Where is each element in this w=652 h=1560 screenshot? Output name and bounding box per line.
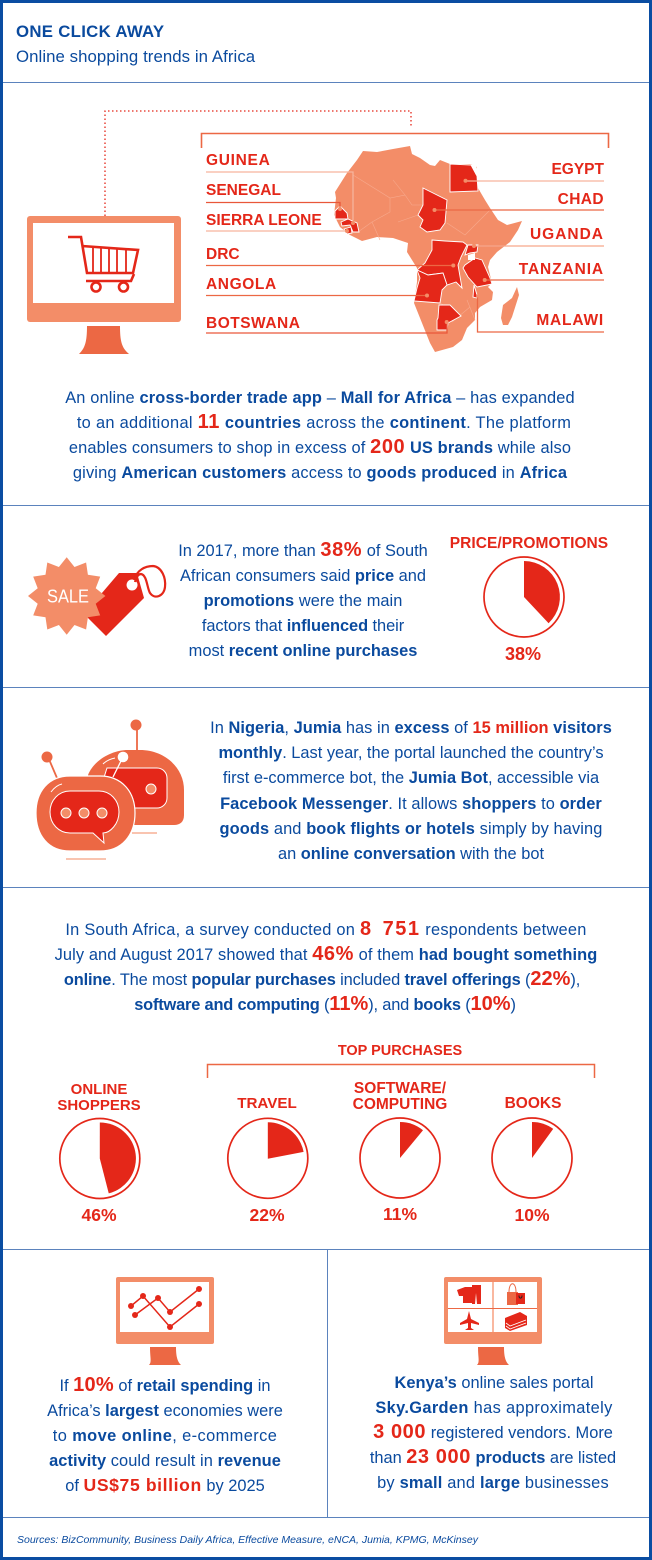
pie labels: 46%	[81, 1205, 117, 1225]
text: South African price: In 2017, more than 38% of South	[178, 539, 428, 561]
icon: shopping monitor	[27, 216, 181, 354]
pie: travel	[228, 1118, 308, 1198]
map labels: SENEGAL	[206, 182, 281, 199]
text: Nigeria Jumia: Facebook Messenger. It allows shoppers to order	[220, 795, 602, 813]
map labels: BOTSWANA	[206, 315, 300, 332]
top purchases bracket	[208, 1064, 594, 1078]
map labels: EGYPT	[551, 161, 604, 178]
map labels: SIERRA LEONE	[206, 212, 322, 229]
pie: software	[360, 1118, 440, 1198]
pie: books	[492, 1118, 572, 1198]
pie labels: BOOKS	[505, 1095, 561, 1112]
icon: sale badge and tag: SALE	[47, 586, 89, 606]
text: retail spending: of US$75 billion by 2025	[65, 1475, 265, 1495]
text: South African price: factors that influenced their	[202, 617, 404, 635]
pie labels: ONLINE	[71, 1081, 127, 1098]
pie labels: 10%	[514, 1205, 550, 1225]
text: retail spending: to move online, e-commerce	[53, 1427, 277, 1445]
pie: online shoppers	[60, 1118, 140, 1198]
pie labels	[57, 1080, 561, 1225]
text: South Africa survey	[54, 918, 597, 1015]
text: Kenya Sky.Garden: than 23 000 products are listed	[370, 1446, 616, 1468]
text: Mall for Africa	[65, 389, 575, 482]
value: 38%: 38%	[505, 644, 541, 664]
title: ONE CLICK AWAY	[16, 22, 164, 41]
text: South African price: most recent online purchases	[189, 642, 417, 660]
pie labels: SHOPPERS	[57, 1097, 141, 1114]
map labels: DRC	[206, 246, 240, 263]
map labels: TANZANIA	[519, 261, 604, 278]
subtitle: Online shopping trends in Africa	[16, 47, 255, 66]
heading: top purchases: TOP PURCHASES	[338, 1043, 462, 1059]
sources: Sources: BizCommunity, Business Daily Africa, Effective Measure, eNCA, Jumia, KPMG, McKinsey	[17, 1534, 478, 1546]
text: South African price: African consumers said price and	[180, 567, 426, 585]
text: Nigeria Jumia	[210, 719, 612, 863]
map labels: MALAWI	[536, 312, 604, 329]
text: Kenya Sky.Garden	[370, 1374, 616, 1492]
map labels: GUINEA	[206, 152, 270, 169]
icon: chart monitor	[116, 1277, 214, 1365]
text: South Africa survey: In South Africa, a survey conducted on 8 751 respondents between	[65, 918, 587, 940]
icon: products monitor	[444, 1277, 542, 1365]
text: Nigeria Jumia: goods and book flights or hotels simply by having	[220, 820, 602, 838]
map location dots	[338, 179, 487, 324]
text: South Africa survey: online. The most popular purchases included travel offerings (22%),	[64, 968, 580, 990]
text: retail spending	[47, 1374, 283, 1495]
icon: chat bots	[36, 720, 184, 859]
map labels: ANGOLA	[206, 276, 277, 293]
text: South African price	[178, 539, 428, 660]
text: South Africa survey: software and computing (11%), and books (10%)	[134, 993, 516, 1015]
text: Mall for Africa: giving American customers access to goods produced in Africa	[73, 464, 567, 482]
text: Mall for Africa: to an additional 11 countries across the continent. The platform	[77, 411, 571, 433]
icon: sale badge and tag	[28, 557, 165, 636]
map of Africa	[334, 146, 522, 352]
text: retail spending: activity could result in revenue	[49, 1452, 281, 1470]
bracket over map	[202, 134, 608, 148]
text: Nigeria Jumia: an online conversation with the bot	[278, 845, 544, 863]
label: price promotions: PRICE/PROMOTIONS	[450, 535, 608, 552]
text: Nigeria Jumia: monthly. Last year, the portal launched the country’s	[218, 744, 604, 762]
pie labels: SOFTWARE/	[354, 1080, 446, 1097]
map labels	[206, 152, 604, 332]
text: South Africa survey: July and August 2017 showed that 46% of them had bought something	[55, 943, 597, 965]
text: retail spending: If 10% of retail spending in	[60, 1374, 270, 1396]
pie labels: 22%	[249, 1205, 285, 1225]
pie labels: TRAVEL	[237, 1095, 297, 1112]
text: Mall for Africa: An online cross-border trade app – Mall for Africa – has expanded	[65, 389, 575, 407]
text: Kenya Sky.Garden: 3 000 registered vendors. More	[373, 1421, 613, 1443]
pie: price promotions	[484, 557, 564, 637]
text: Kenya Sky.Garden: Kenya’s online sales portal	[395, 1374, 593, 1392]
text: Kenya Sky.Garden: Sky.Garden has approximately	[375, 1399, 613, 1417]
pie labels: 11%	[383, 1204, 417, 1224]
text: South African price: promotions were the main	[204, 592, 402, 610]
text: Kenya Sky.Garden: by small and large businesses	[377, 1474, 609, 1492]
text: Nigeria Jumia: first e-commerce bot, the Jumia Bot, accessible via	[223, 769, 599, 787]
pie labels: COMPUTING	[353, 1096, 447, 1113]
dotted connector	[105, 111, 411, 216]
text: retail spending: Africa’s largest economies were	[47, 1402, 283, 1420]
map labels: UGANDA	[530, 226, 604, 243]
map leader lines	[206, 172, 604, 333]
map labels: CHAD	[558, 191, 604, 208]
text: Mall for Africa: enables consumers to shop in excess of 200 US brands while also	[69, 436, 571, 458]
text: Nigeria Jumia: In Nigeria, Jumia has in excess of 15 million visitors	[210, 719, 612, 737]
